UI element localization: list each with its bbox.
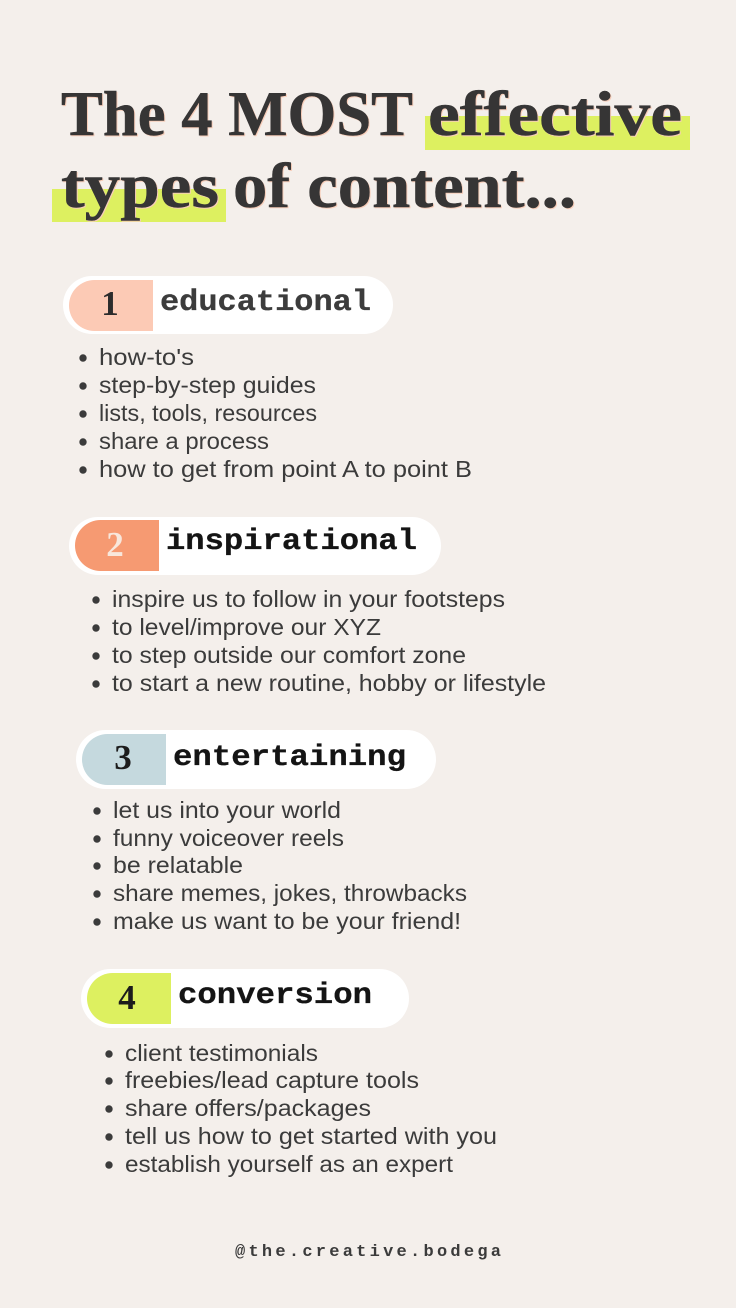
pill: entertaining: entertaining [173,741,406,775]
list: educational: lists, tools, resources [99,400,317,426]
pill: educational: 1 [101,284,119,323]
pill: inspirational: 2 [106,525,124,564]
list: educational: share a process [99,428,269,454]
title: The 4 MOST: The 4 MOST [61,79,413,149]
list: educational: how-to's [99,344,194,370]
highlight: types [52,189,226,222]
list: educational [79,344,472,482]
list: conversion: tell us how to get started with you [125,1123,497,1149]
footer handle: @the.creative.bodega [235,1243,501,1262]
panel: entertaining [76,730,467,934]
list: entertaining: let us into your world [113,797,341,823]
title: of content: of content... [233,151,576,221]
pill: conversion: conversion [178,979,372,1013]
list: conversion: client testimonials [125,1040,318,1066]
pill: conversion [81,969,409,1028]
title: effective: effective [428,79,682,149]
pill: inspirational: inspirational [166,525,417,559]
title: types: types [61,151,219,221]
list: inspirational: to start a new routine, hobby or lifestyle [112,670,546,696]
list: conversion: share offers/packages [125,1095,371,1121]
list: conversion: freebies/lead capture tools [125,1067,419,1093]
list: entertaining: be relatable [113,852,243,878]
list: inspirational: to step outside our comfort zone [112,642,466,668]
panel: conversion [81,969,497,1177]
list: inspirational: inspire us to follow in your footsteps [112,586,505,612]
pill: inspirational [69,517,441,575]
list: educational: how to get from point A to point B [99,456,472,482]
pill: entertaining [76,730,436,789]
pill: entertaining: 3 [114,738,132,777]
list: entertaining: funny voiceover reels [113,825,344,851]
list: entertaining: share memes, jokes, throwbacks [113,880,467,906]
list: conversion: establish yourself as an expert [125,1151,454,1177]
list: entertaining: make us want to be your friend! [113,908,461,934]
panel: inspirational [69,517,546,696]
pill: conversion: 4 [118,978,136,1017]
list: entertaining [93,797,467,934]
title [52,79,690,222]
highlight: effective [425,116,690,150]
list: inspirational: to level/improve our XYZ [112,614,381,640]
list: inspirational [92,586,546,696]
list: conversion [105,1040,497,1177]
pill: educational: educational [160,286,371,320]
list: educational: step-by-step guides [99,372,316,398]
pill: educational [63,276,393,334]
panel: educational [63,276,472,482]
